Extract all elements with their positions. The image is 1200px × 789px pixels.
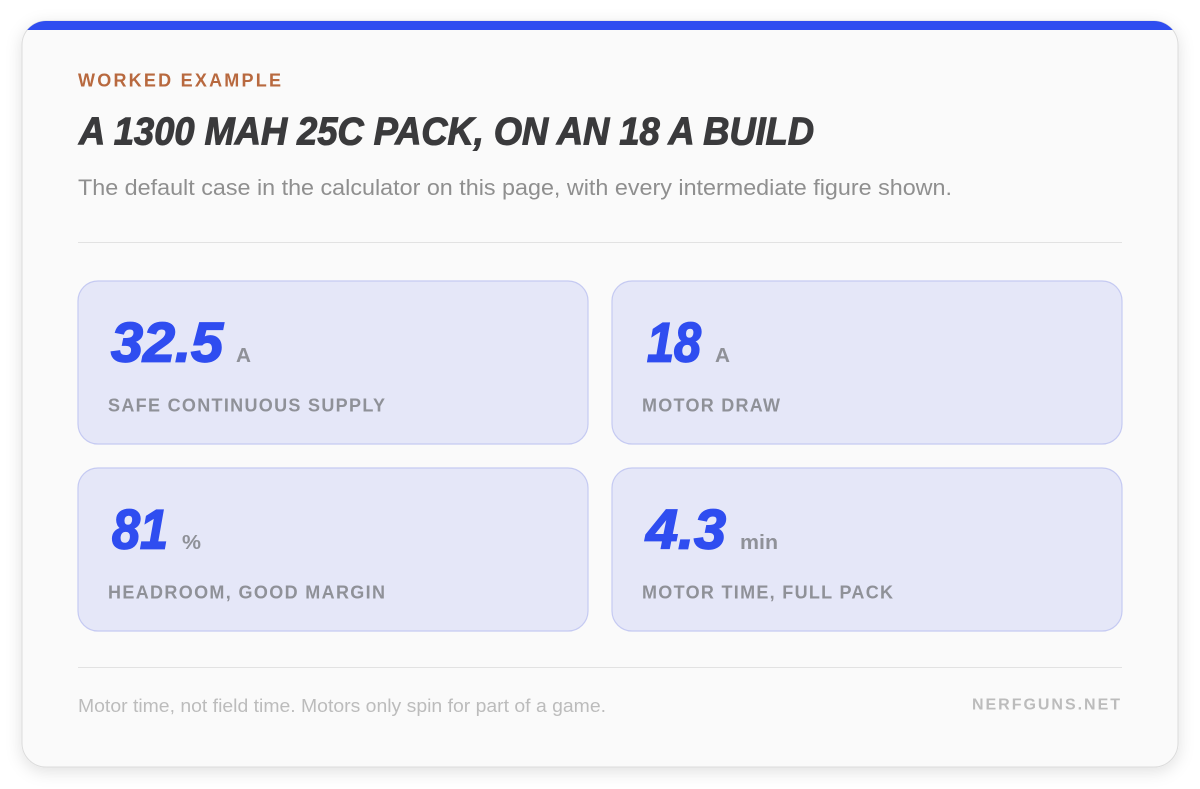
stat card: safe continuous supply: A [236, 345, 251, 367]
stat card: safe continuous supply [78, 281, 588, 444]
footer note: Motor time, not field time. Motors only spin for part of a game. [78, 696, 606, 716]
stat card: motor draw: A [715, 345, 730, 367]
eyebrow: worked example: WORKED EXAMPLE [78, 70, 281, 90]
stat card: safe continuous supply: SAFE CONTINUOUS SUPPLY [108, 396, 385, 416]
stat card: motor time [612, 468, 1122, 631]
stat card: motor time: min [740, 532, 778, 554]
stat card: motor draw: 18 [647, 310, 702, 374]
footer brand: NERFGUNS.NET [972, 696, 1120, 714]
stat card: motor draw [612, 281, 1122, 444]
stat card: motor draw: MOTOR DRAW [642, 396, 780, 416]
stat card: headroom: HEADROOM, GOOD MARGIN [108, 582, 385, 602]
stat card: headroom: 81 [112, 498, 168, 560]
stat card: motor time: 4.3 [645, 498, 726, 560]
stat card: headroom: % [182, 532, 201, 554]
stat card: safe continuous supply: 32.5 [111, 310, 224, 374]
stat card: motor time: MOTOR TIME, FULL PACK [642, 582, 893, 602]
stat card: headroom [78, 468, 588, 631]
subtitle: The default case in the calculator on this page, with every intermediate figure shown. [78, 175, 952, 200]
title: A 1300 MAH 25C PACK, ON AN 18 A BUILD [78, 110, 814, 154]
